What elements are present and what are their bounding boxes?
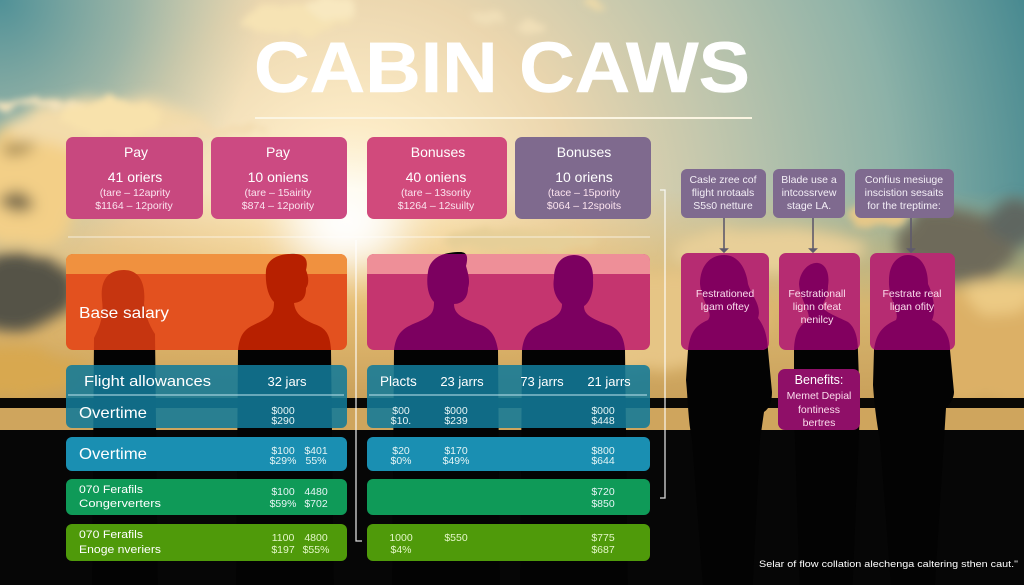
panel: festrate: ligan ofity xyxy=(890,301,935,313)
table row: plácts right: Placts xyxy=(380,374,417,389)
table row: plácts right: $000 xyxy=(591,405,615,417)
panel: bonuses card 2: Bonuses xyxy=(557,144,611,160)
railing xyxy=(0,398,1024,408)
table row: flight allowances left xyxy=(66,365,347,428)
panel: benefits: fontiness xyxy=(798,404,840,416)
panel: pay card 1: (tare – 12aprity xyxy=(100,187,171,199)
panel: pay card 1 xyxy=(66,137,203,219)
panel: bonuses card 2: $064 – 12spoits xyxy=(547,200,621,212)
table row: ferafils left: $100 xyxy=(271,486,295,498)
table row: ferafils left xyxy=(66,479,347,515)
note: flight rotation: Casle zree cof xyxy=(689,174,757,186)
panel: bonuses card 1: $1264 – 12suilty xyxy=(398,200,475,212)
table row: overtime right: $800 xyxy=(591,445,615,457)
note: confirm message: for the treptime: xyxy=(867,200,941,212)
panel: base salary: Base salary xyxy=(79,305,169,322)
panel: bonus band xyxy=(367,254,650,350)
note: flight rotation xyxy=(681,169,766,218)
table row: ferafils left: $702 xyxy=(304,498,328,510)
title underline xyxy=(255,117,752,119)
panel: festrationed 2 xyxy=(779,253,860,350)
table row: ferafils right xyxy=(367,479,650,515)
table row: ferafils right: $720 xyxy=(591,486,615,498)
panel: benefits: bertres xyxy=(803,417,835,429)
table row: engine right: $4% xyxy=(390,544,412,556)
table row: plácts right: $00 xyxy=(392,405,410,417)
panel: pay card 1: Pay xyxy=(124,144,148,160)
panel: base salary xyxy=(66,254,347,350)
panel: bonuses card 2 xyxy=(515,137,651,219)
table row: plácts right xyxy=(367,365,650,428)
table row: plácts right: 73 jarrs xyxy=(520,374,564,389)
panel: pay card 1: $1164 – 12pority xyxy=(95,200,173,212)
note: stage use: Blade use a xyxy=(781,174,837,186)
table row: plácts right: $10. xyxy=(391,415,411,427)
table row: flight allowances left: $000 xyxy=(271,405,295,417)
note: confirm message: Confius mesiuge xyxy=(865,174,943,186)
panel: pay card 2: 10 oniens xyxy=(248,169,308,185)
panel: benefits: Memet Depial xyxy=(787,390,851,402)
panel: pay card 2: $874 – 12pority xyxy=(242,200,315,212)
table row: flight allowances left: Flight allowances xyxy=(84,373,211,390)
note: flight rotation: S5s0 netture xyxy=(693,200,753,212)
note: confirm message xyxy=(855,169,954,218)
table row: flight allowances left: 32 jars xyxy=(267,374,307,389)
note: stage use: intcossrvew xyxy=(782,187,837,199)
table row: engine right: $775 xyxy=(591,532,615,544)
panel: pay card 2: (tare – 15airity xyxy=(244,187,312,199)
table row: overtime left: $100 xyxy=(271,445,295,457)
table row: overtime left: $401 xyxy=(304,445,328,457)
panel: bonuses card 1: Bonuses xyxy=(411,144,465,160)
connector brackets xyxy=(68,190,665,541)
table row: overtime left: 55% xyxy=(305,455,327,467)
table row: overtime right xyxy=(367,437,650,471)
table row: plácts right: $448 xyxy=(591,415,615,427)
table row: overtime left xyxy=(66,437,347,471)
table row: engine left xyxy=(66,524,347,561)
table row: plácts right: $000 xyxy=(444,405,468,417)
table row: engine left: Enoge nveriers xyxy=(79,544,162,556)
table row: engine right: 1000 xyxy=(389,532,413,544)
panel: festrationed 1: lgam oftey xyxy=(701,301,750,313)
table row: overtime right: $20 xyxy=(392,445,410,457)
table row: overtime right: $49% xyxy=(443,455,469,467)
panel: festrationed 1 xyxy=(681,253,769,350)
table row: engine right: $550 xyxy=(444,532,468,544)
panel: festrate: Festrate real xyxy=(883,288,941,300)
panel: festrationed 2: nenilcy xyxy=(801,314,834,326)
table row: engine left: $197 xyxy=(271,544,295,556)
table row: ferafils left: 070 Ferafils xyxy=(79,484,144,496)
panel: pay card 2: Pay xyxy=(266,144,290,160)
panel: bonuses card 1: 40 oniens xyxy=(406,169,466,185)
table row: ferafils left: Congerverters xyxy=(79,498,162,510)
panel: festrationed 2: lignn ofeat xyxy=(793,301,841,313)
table row: plácts right: $239 xyxy=(444,415,468,427)
footer note: Selar of flow collation alechenga caltering sthen caut." xyxy=(759,559,1018,570)
table row: ferafils left: $59% xyxy=(270,498,296,510)
panel: benefits xyxy=(778,369,860,430)
note: stage use: stage LA. xyxy=(787,200,831,212)
panel: benefits: Benefits: xyxy=(795,373,843,387)
table row: overtime left: Overtime xyxy=(79,446,147,463)
table row: flight allowances left: $290 xyxy=(271,415,295,427)
note: stage use xyxy=(773,169,845,218)
panel: bonuses card 1: (tare – 13sority xyxy=(401,187,472,199)
table row: engine left: 070 Ferafils xyxy=(79,529,144,541)
table row: plácts right: 21 jarrs xyxy=(587,374,631,389)
panel: pay card 2 xyxy=(211,137,347,219)
table row: engine right xyxy=(367,524,650,561)
table row: flight allowances left: Overtime xyxy=(79,405,147,422)
table row: ferafils left: 4480 xyxy=(304,486,328,498)
panel: festrate xyxy=(870,253,955,350)
table row: overtime right: $0% xyxy=(390,455,412,467)
table row: engine left: $55% xyxy=(303,544,329,556)
table row: overtime left: $29% xyxy=(270,455,296,467)
table row: ferafils right: $850 xyxy=(591,498,615,510)
table row: overtime right: $644 xyxy=(591,455,615,467)
table row: overtime right: $170 xyxy=(444,445,468,457)
title: CABIN CAWS xyxy=(254,29,750,108)
arrows from notes to panels xyxy=(721,218,914,252)
silhouettes of crew xyxy=(92,252,954,585)
panel: bonuses card 2: (tace – 15pority xyxy=(548,187,621,199)
table row: engine left: 1100 xyxy=(272,532,294,544)
panel: festrationed 1: Festrationed xyxy=(696,288,754,300)
table row: plácts right: 23 jarrs xyxy=(440,374,484,389)
table row: engine right: $687 xyxy=(591,544,615,556)
panel: pay card 1: 41 oriers xyxy=(108,169,162,185)
table row: engine left: 4800 xyxy=(304,532,328,544)
panel: bonuses card 1 xyxy=(367,137,507,219)
note: flight rotation: flight nrotaals xyxy=(692,187,754,199)
note: confirm message: inscistion sesaits xyxy=(865,187,943,199)
panel: festrationed 2: Festrationall xyxy=(788,288,846,300)
panel: bonuses card 2: 10 oriens xyxy=(555,169,613,185)
